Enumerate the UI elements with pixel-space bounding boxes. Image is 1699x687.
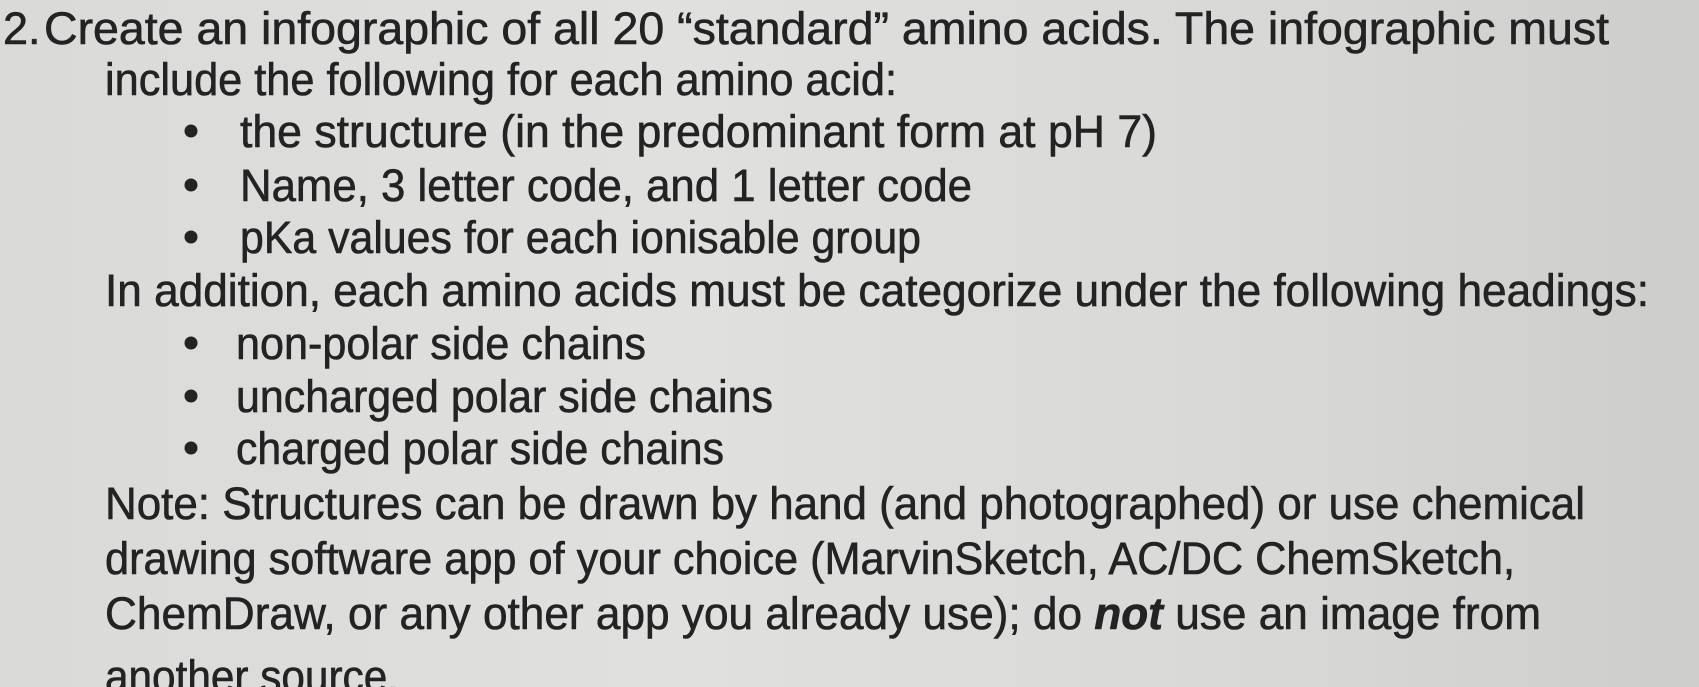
categories intro: In addition, each amino acids must be categorize under the following headings:: [105, 265, 1649, 316]
note paragraph: [105, 478, 1585, 687]
heading question: include the following for each amino acid:: [105, 54, 897, 105]
requirement list: pKa values for each ionisable group: [240, 212, 921, 263]
note paragraph: drawing software app of your choice (MarvinSketch, AC/DC ChemSketch,: [105, 533, 1515, 584]
note paragraph: ChemDraw, or any other app you already use); do not use an image from: [105, 588, 1541, 639]
requirement list: Name, 3 letter code, and 1 letter code: [240, 160, 972, 211]
requirement list: [184, 106, 1157, 263]
heading question: 2.: [3, 3, 41, 54]
category list: uncharged polar side chains: [236, 371, 773, 422]
note paragraph: Note: Structures can be drawn by hand (and photographed) or use chemical: [105, 478, 1585, 529]
heading question: Create an infographic of all 20 “standard” amino acids. The infographic must: [44, 3, 1610, 54]
category list: [184, 318, 773, 474]
heading question: [3, 3, 1610, 105]
category list: charged polar side chains: [236, 423, 724, 474]
requirement list: the structure (in the predominant form at pH 7): [240, 106, 1157, 157]
category list: non-polar side chains: [236, 318, 646, 369]
